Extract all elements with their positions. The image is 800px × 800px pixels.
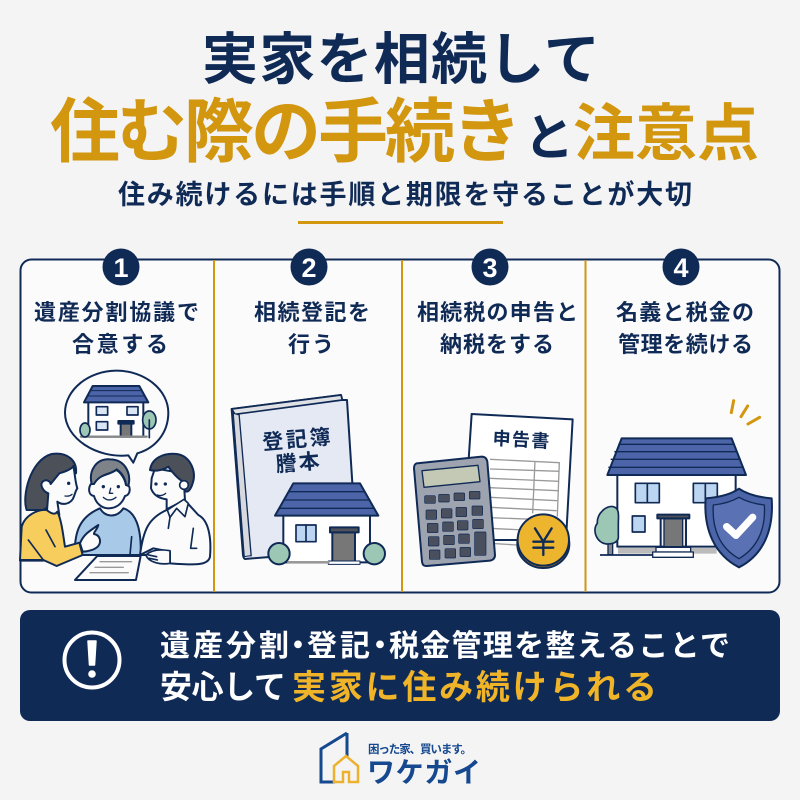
banner text line 1: 遺産分割 bbox=[160, 630, 289, 663]
step 1 heading: 合意する bbox=[72, 332, 168, 357]
sparkle marks bbox=[731, 401, 760, 424]
step 2 heading bbox=[254, 300, 370, 357]
step 1 number badge: 1 bbox=[113, 253, 129, 283]
book label text bbox=[261, 426, 332, 477]
step 2 heading: 行う bbox=[288, 332, 334, 357]
step 4 heading: 管理を続ける bbox=[618, 332, 753, 357]
step 3 number badge: 3 bbox=[482, 253, 498, 283]
man in white shirt bbox=[140, 454, 210, 564]
banner text line 2: 安心して bbox=[160, 669, 286, 705]
illustration: speech bubble with house bbox=[65, 371, 168, 463]
step 1 number badge bbox=[102, 248, 140, 286]
house bbox=[268, 483, 385, 564]
banner text line 1: ・ bbox=[283, 630, 313, 663]
book label text: 登記簿 bbox=[261, 426, 332, 455]
step 3 heading: 相続税の申告と bbox=[417, 300, 578, 325]
yen coin bbox=[517, 514, 569, 568]
title line 1: 実家を相続して bbox=[202, 28, 600, 91]
step 2 number badge: 2 bbox=[301, 253, 317, 283]
logo: Wakegai bbox=[321, 733, 481, 788]
book label text: 謄本 bbox=[275, 450, 321, 477]
tree bbox=[595, 506, 619, 555]
elderly man in blue sweater bbox=[75, 459, 141, 555]
step 1 heading: 遺産分割協議で bbox=[34, 300, 199, 325]
illustration: tax return, calculator and yen coin bbox=[414, 414, 573, 568]
banner text line 2: 実家に住み続けられる bbox=[292, 669, 657, 707]
illustration: protected house with shield bbox=[595, 401, 772, 567]
step 3 heading: 納税をする bbox=[440, 332, 554, 357]
woman in yellow sweater bbox=[20, 454, 83, 566]
step 4 number badge: 4 bbox=[673, 253, 689, 283]
man's hand on table bbox=[146, 550, 170, 564]
step 4 heading bbox=[616, 300, 754, 357]
illustration: family at the table bbox=[20, 454, 210, 580]
subtitle: 住み続けるには手順と期限を守ることが大切 bbox=[118, 179, 692, 210]
illustration: registry book and house bbox=[232, 395, 385, 564]
book bbox=[232, 395, 357, 559]
gold underline bbox=[298, 221, 503, 224]
calculator bbox=[414, 457, 495, 566]
banner text line 1: ・ bbox=[365, 630, 395, 663]
house bbox=[600, 438, 746, 557]
icon: exclamation mark bbox=[64, 632, 120, 688]
logo name: ワケガイ bbox=[367, 757, 481, 788]
title line 2: 注意点 bbox=[573, 100, 759, 169]
logo mark bbox=[321, 733, 358, 782]
step 4 number badge bbox=[662, 248, 700, 286]
step 4 heading: 名義と税金の bbox=[616, 300, 754, 325]
logo tagline: 困った家、買います。 bbox=[368, 742, 472, 756]
table edge bbox=[20, 555, 146, 561]
step 2 heading: 相続登記を bbox=[254, 300, 370, 325]
banner text line 1: 税金管理を整えることで bbox=[389, 630, 730, 663]
step 3 heading bbox=[417, 300, 578, 357]
tax return form bbox=[463, 414, 573, 545]
title line 2: 住む際の手続き bbox=[50, 93, 522, 171]
panel: four steps bbox=[20, 248, 780, 592]
document on table bbox=[75, 556, 141, 580]
title line 2: と bbox=[524, 110, 574, 166]
step 1 heading bbox=[34, 300, 199, 357]
shield with check mark bbox=[705, 489, 772, 567]
banner text line 1: 登記 bbox=[307, 630, 370, 663]
banner text line 1 bbox=[160, 630, 730, 663]
banner: key message bbox=[20, 610, 780, 721]
pointing hand bbox=[80, 525, 100, 552]
step 3 number badge bbox=[472, 248, 508, 286]
tax return form: 申告書 bbox=[492, 428, 550, 452]
title line 2 bbox=[50, 93, 759, 171]
step 2 number badge bbox=[290, 248, 328, 286]
